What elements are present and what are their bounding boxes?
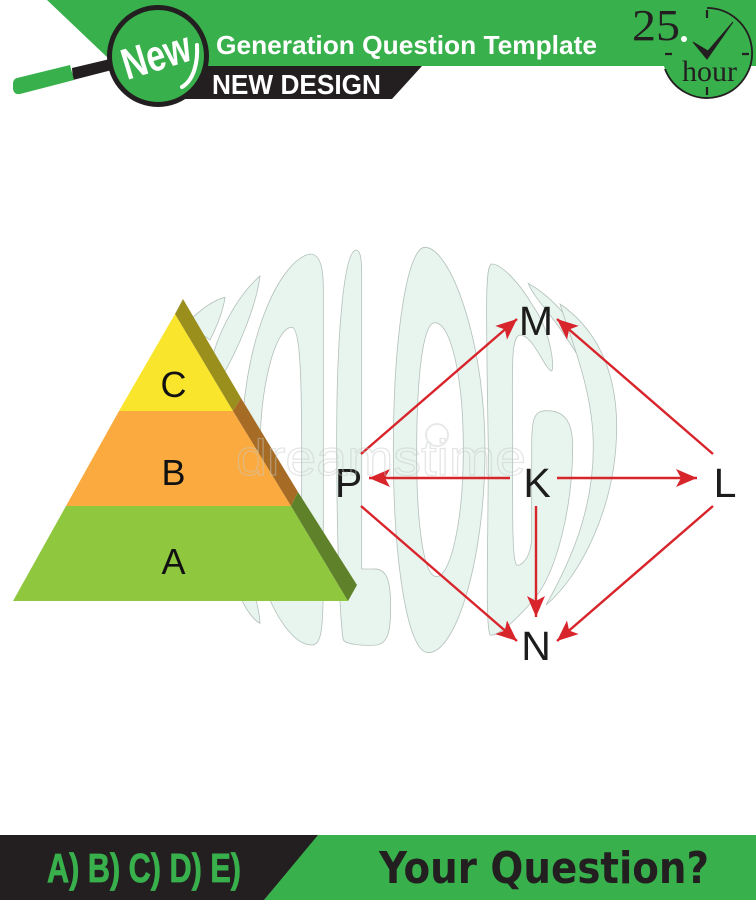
node L: L: [714, 460, 736, 506]
black new design ribbon: [180, 66, 422, 99]
magnifier lens: [110, 8, 206, 104]
header banner: [47, 0, 756, 100]
art letter sliver 2: [213, 276, 260, 380]
node K: K: [523, 460, 551, 506]
label B: B: [161, 452, 186, 493]
your question text: Your Question?: [378, 843, 709, 894]
art letter Y upper stroke: [528, 283, 597, 388]
art letter Y lower stroke: [546, 304, 617, 605]
node M: M: [519, 298, 553, 344]
arrow K to L: [557, 477, 697, 479]
art letter sliver 3: [242, 593, 260, 623]
clock outline: [665, 8, 752, 98]
label A: A: [161, 541, 186, 582]
art letter O right: [393, 247, 485, 653]
dreamstime watermark: [236, 424, 526, 486]
arrow P to N: [361, 506, 517, 641]
icon: 25 hour clock: [632, 1, 752, 98]
background word art: [187, 247, 617, 653]
answer choices: A) B) C) D) E): [47, 845, 241, 891]
arrow L to M: [557, 319, 713, 454]
green header band: [47, 0, 756, 66]
25 numeral: 25: [632, 1, 680, 50]
magnifier green handle: [13, 65, 74, 94]
clock face: [662, 8, 752, 98]
watermark spiral: [426, 424, 448, 446]
clock ticks: [665, 10, 749, 95]
art letter sliver 1: [187, 297, 225, 340]
magnifier shaft: [72, 59, 112, 80]
white dot: [681, 36, 687, 42]
label C: C: [160, 364, 186, 405]
arrow K to P: [369, 477, 510, 479]
pyramid side lower: [291, 492, 357, 601]
art letter G: [487, 264, 573, 635]
header title: Generation Question Template: [216, 30, 597, 60]
arrow K to N: [535, 506, 537, 617]
hour label: hour: [682, 55, 737, 88]
pyramid side upper: [175, 299, 241, 411]
pyramid side middle: [233, 398, 298, 506]
tier B: [66, 411, 291, 506]
footer bar: [0, 835, 756, 900]
tier C: [119, 314, 233, 411]
tail of the New lettering: [182, 45, 197, 87]
black answer panel: [0, 835, 318, 900]
node P: P: [335, 460, 362, 506]
node N: N: [521, 623, 551, 669]
icon: magnifying glass with New: [13, 8, 206, 104]
new design label: NEW DESIGN: [212, 69, 381, 100]
green footer panel: [264, 835, 756, 900]
check mark: [693, 22, 733, 59]
pyramid: [13, 299, 357, 601]
arrow P to M: [361, 319, 517, 454]
watermark word: dreamstime: [236, 430, 526, 486]
arrow L to N: [557, 506, 713, 641]
relationship diagram: [335, 298, 736, 669]
New lettering: New: [116, 22, 197, 90]
art letter O left: [242, 254, 323, 645]
art letter L: [337, 250, 391, 645]
tier A: [13, 506, 348, 601]
